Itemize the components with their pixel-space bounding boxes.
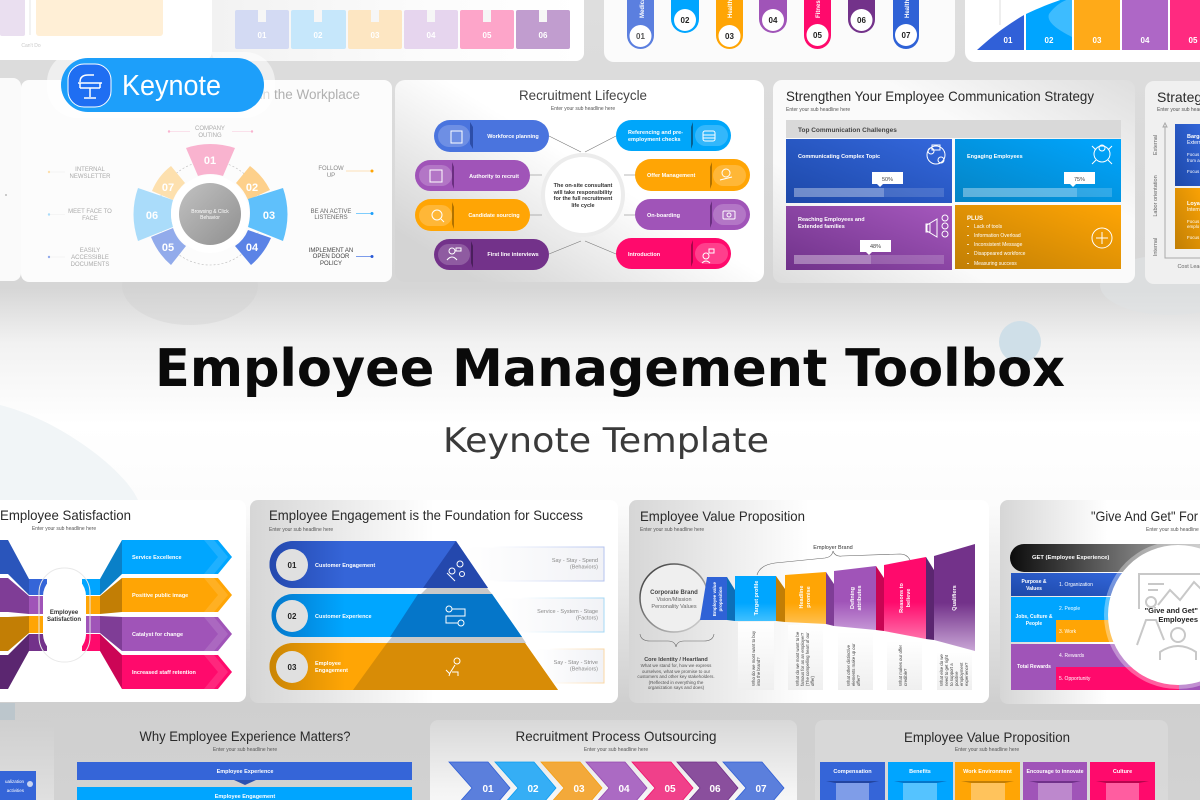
panel: top numbered cards xyxy=(212,0,584,61)
funnel sections: Headline xyxy=(799,586,805,608)
columns of questions: credible? xyxy=(903,668,908,686)
corporate brand circle: Personality Values xyxy=(651,604,697,610)
row 03 employee engagement: Employee xyxy=(315,661,341,667)
panel: top area chart: 02 xyxy=(1045,36,1054,45)
wheel diagram: 04 xyxy=(246,242,259,254)
tile: loyalty: Focus xyxy=(1187,235,1200,240)
capsule 02: 02 xyxy=(681,16,690,25)
tile: bargain: Focus xyxy=(1187,152,1200,157)
tile: bargain: Focus xyxy=(1187,169,1200,174)
pill: first line interviews: First line interviews xyxy=(487,252,539,258)
arrow: service excellence xyxy=(122,540,232,574)
tile: engaging employees: 75% xyxy=(1074,177,1085,183)
tile: loyalty: emplo xyxy=(1187,224,1200,229)
pill: authority to recruit xyxy=(415,160,530,191)
labels left and top: MEET FACE TO xyxy=(68,209,112,215)
tile: reaching employees: Extended families xyxy=(798,224,845,230)
GET pill xyxy=(1010,544,1200,572)
capsule 06 xyxy=(848,0,875,33)
funnel sections: believe xyxy=(906,589,912,607)
pill: referencing xyxy=(616,120,731,151)
column: compensation xyxy=(820,762,885,800)
subtitle: Enter your sub headline here xyxy=(640,527,704,533)
row 03 employee engagement xyxy=(269,643,558,690)
row 03 employee engagement: Engagement xyxy=(315,668,348,674)
tile: communicating complex topic: 50% xyxy=(882,177,893,183)
center circle xyxy=(543,155,623,235)
center circle: The on-site consultant xyxy=(554,183,613,189)
columns of questions: (The compelling heart of our xyxy=(805,632,810,686)
panel: top area chart: 03 xyxy=(1093,36,1102,45)
row: total rewards xyxy=(1011,644,1200,690)
labels right: UP xyxy=(327,173,335,179)
panel: employee value proposition funnel xyxy=(629,500,989,703)
title: Employee Value Proposition xyxy=(904,729,1070,745)
row 03 employee engagement: 03 xyxy=(288,663,297,672)
tile: loyalty: Intern xyxy=(1187,207,1200,213)
tile: engaging employees: Engaging Employees xyxy=(967,154,1023,160)
core identity note xyxy=(637,634,715,690)
side note boxes: Say - Stay - Spend xyxy=(552,558,598,564)
columns of questions: offer? xyxy=(856,674,861,686)
pill: offer management: Offer Management xyxy=(647,173,695,179)
column: compensation: Compensation xyxy=(833,769,872,775)
wheel diagram: 05 xyxy=(162,242,174,254)
labels left and top: OUTING xyxy=(198,133,222,139)
center oval: Satisfaction xyxy=(47,617,81,623)
labels left and top: INTERNAL xyxy=(75,167,105,173)
funnel sections: attributes xyxy=(857,585,863,611)
subtitle: Enter your sub headline here xyxy=(32,526,96,532)
panel: top left faded slide xyxy=(0,0,212,60)
row: purpose and values: Values xyxy=(1026,586,1042,592)
labels right: BE AN ACTIVE xyxy=(311,209,351,215)
panel: lower left slide: activities xyxy=(7,788,25,793)
columns of questions: What other distinctive xyxy=(846,644,851,686)
columns of questions: Who do we most want to buy xyxy=(751,630,756,686)
column: culture xyxy=(1090,762,1155,800)
center circle: Employees xyxy=(1158,615,1198,624)
column: work environment: Work Environment xyxy=(963,769,1012,775)
wheel diagram: 06 xyxy=(146,210,158,222)
row: total rewards: 5. Opportunity xyxy=(1059,676,1091,682)
row: jobs culture people: 2. People xyxy=(1059,606,1080,612)
corporate brand circle: Corporate Brand xyxy=(650,590,698,596)
columns of questions: What makes our offer xyxy=(898,644,903,686)
side note boxes: Service - System - Stage xyxy=(537,609,598,615)
column: work environment xyxy=(955,762,1020,800)
labels right xyxy=(309,166,374,267)
wheel diagram: 02 xyxy=(246,182,258,194)
axis labels: Labor orientation xyxy=(1153,175,1159,217)
labels left and top: ACCESSIBLE xyxy=(71,255,109,261)
row: jobs culture people xyxy=(1011,597,1136,642)
panel: top area chart: 05 xyxy=(1189,36,1198,45)
tile: plus list: Inconsistent Message xyxy=(974,242,1023,248)
center circle: for the full recruitment xyxy=(554,196,613,202)
arrow: positive public image: Positive public image xyxy=(132,593,188,599)
capsule 01: 01 xyxy=(636,32,645,41)
panel: top numbered cards: 01 xyxy=(258,31,267,40)
row 01 customer engagement: Customer Engagement xyxy=(315,563,375,569)
tile: bargain xyxy=(1175,124,1200,186)
pill: on-boarding: On-boarding xyxy=(647,213,680,219)
header band: Top Communication Challenges xyxy=(798,127,897,134)
axis labels: Internal xyxy=(1153,238,1159,256)
axes xyxy=(1163,123,1200,258)
funnel sections: Employee value xyxy=(712,582,717,616)
core identity note: customers and other key stakeholders. xyxy=(637,674,715,679)
columns of questions xyxy=(738,622,972,690)
title: Why Employee Experience Matters? xyxy=(140,728,351,744)
subtitle: Enter your sub headline here xyxy=(584,747,648,753)
pill: first line interviews xyxy=(434,239,549,270)
wheel diagram: 07 xyxy=(162,182,174,194)
arrow: positive public image xyxy=(122,578,232,612)
labels left and top: COMPANY xyxy=(195,126,225,132)
employer brand brace xyxy=(757,545,910,575)
axis labels: External xyxy=(1153,135,1159,155)
header band xyxy=(786,120,1121,138)
core identity note: What we stand for, how we express xyxy=(641,663,712,668)
funnel sections: Target profile xyxy=(754,581,760,615)
tile: loyalty xyxy=(1175,188,1200,249)
pill: referencing: employment checks xyxy=(628,137,681,143)
column: culture: Culture xyxy=(1113,769,1132,775)
arrow: catalyst for change: Catalyst for change xyxy=(132,632,183,638)
chevron steps xyxy=(449,762,784,800)
funnel sections xyxy=(700,544,975,651)
background block: lower left xyxy=(0,703,15,720)
capsule 07: 07 xyxy=(902,31,911,40)
side note boxes xyxy=(387,547,604,683)
panel: top area chart xyxy=(965,0,1200,62)
columns of questions: offer) xyxy=(810,675,815,686)
pill: workforce planning xyxy=(434,120,549,152)
panel title: in the Workplace xyxy=(260,87,360,102)
panel: give and get xyxy=(1000,500,1200,704)
core identity note: ourselves, what we promise to our xyxy=(642,669,711,674)
panel: top numbered cards: 06 xyxy=(539,31,548,40)
bar: employee experience: Employee Experience xyxy=(217,769,273,775)
tile: communicating complex topic: Communicating Complex Topic xyxy=(798,154,880,160)
tile: communicating complex topic xyxy=(786,139,952,203)
center circle xyxy=(1104,541,1200,689)
panel: top numbered cards: 04 xyxy=(427,31,436,40)
subtitle: Enter your sub headline here xyxy=(786,107,850,113)
column: encourage to innovate xyxy=(1023,762,1087,800)
panel: lower left slide xyxy=(0,720,54,800)
panel: communication in the workplace wheel xyxy=(21,80,392,282)
chevron steps: 05 xyxy=(664,784,676,795)
subtitle: Enter your sub headline here xyxy=(213,747,277,753)
wheel diagram: 03 xyxy=(263,210,275,222)
pill: on-boarding xyxy=(635,199,750,230)
wheel diagram: Behavior xyxy=(200,215,220,221)
left folded ribbons xyxy=(0,540,47,689)
panel: top numbered cards: 02 xyxy=(314,31,323,40)
title: Employee Satisfaction xyxy=(0,507,131,523)
capsule 05: 05 xyxy=(813,31,822,40)
wheel diagram xyxy=(134,144,288,265)
columns of questions: famous for as an employer? xyxy=(800,632,805,686)
tile: reaching employees: 48% xyxy=(870,244,881,250)
capsule 07 xyxy=(893,0,919,49)
panel: top numbered cards: 05 xyxy=(483,31,492,40)
columns of questions: to support a xyxy=(949,663,954,686)
pill: authority to recruit: Authority to recruit xyxy=(469,174,519,180)
panel: top area chart: 01 xyxy=(1004,36,1013,45)
capsule 03 xyxy=(716,0,743,49)
row 02 customer experience: Customer Experience xyxy=(315,614,372,620)
panel: top area chart: 04 xyxy=(1141,36,1150,45)
tile: engaging employees xyxy=(955,139,1121,202)
row 01 customer engagement: 01 xyxy=(288,561,297,570)
badge: Keynote xyxy=(47,52,275,118)
connector lines xyxy=(530,136,635,254)
center oval xyxy=(39,568,90,662)
row 01 customer engagement xyxy=(269,541,488,588)
corporate brand circle xyxy=(640,564,708,632)
labels right: OPEN DOOR xyxy=(313,254,350,260)
arrow: service excellence: Service Excellence xyxy=(132,555,182,561)
caption: cannot do: Can't Do xyxy=(21,43,41,49)
pill: offer management xyxy=(635,159,750,191)
tile: reaching employees xyxy=(786,206,952,270)
chevron steps: 07 xyxy=(755,784,767,795)
center circle: life cycle xyxy=(571,203,595,209)
panel: left edge slide xyxy=(0,78,21,281)
subtitle: Enter your sub headline here xyxy=(551,106,615,112)
employer brand brace: Employer Brand xyxy=(813,545,853,551)
columns of questions: experience? xyxy=(964,662,969,686)
row: purpose and values: Purpose & xyxy=(1021,579,1047,585)
pill: introduction: Introduction xyxy=(628,252,661,258)
funnel sections: promise xyxy=(806,586,812,608)
arrow: catalyst for change xyxy=(122,617,232,651)
panel: top numbered cards: 03 xyxy=(371,31,380,40)
columns of questions: positive xyxy=(954,671,959,686)
labels left and top: DOCUMENTS xyxy=(71,262,109,268)
tile: plus list: Information Overload xyxy=(974,233,1021,239)
main title: Employee Management Toolbox xyxy=(155,339,1065,399)
pill: workforce planning: Workforce planning xyxy=(487,134,539,140)
panel: employee communication strategy xyxy=(773,80,1135,283)
capsule 01 xyxy=(627,0,654,49)
columns of questions: employment xyxy=(959,662,964,686)
funnel sections: Reasons to xyxy=(899,583,905,613)
core identity note: organization says and does) xyxy=(648,685,705,690)
side note boxes: (Behaviors) xyxy=(570,564,598,570)
row: total rewards: 4. Rewards xyxy=(1059,653,1085,659)
core identity note: Core Identity / Heartland xyxy=(644,657,708,663)
panel: strategy matrix xyxy=(1145,81,1200,284)
badge label: Keynote xyxy=(122,70,221,102)
capsule 03: Health xyxy=(728,0,734,18)
tile: plus list: Measuring success xyxy=(974,261,1017,267)
funnel sections: Qualifiers xyxy=(952,585,958,611)
capsule 07: Health xyxy=(905,0,911,18)
chevron steps: 03 xyxy=(573,784,585,795)
pill: candidate sourcing xyxy=(415,199,530,231)
icon: keynote podium xyxy=(78,75,102,98)
right band connectors xyxy=(82,540,122,689)
bar: employee engagement: Employee Engagement xyxy=(215,794,275,800)
capsule 06: 06 xyxy=(857,16,866,25)
panel: top numbered capsules xyxy=(604,0,955,62)
GET pill: GET (Employee Experience) xyxy=(1032,555,1109,561)
columns of questions: need to get right xyxy=(944,654,949,686)
pill: introduction xyxy=(616,238,731,269)
labels left and top xyxy=(48,126,253,268)
columns of questions: into the brand? xyxy=(756,657,761,686)
panel: recruitment lifecycle xyxy=(395,80,764,282)
center oval: Employee xyxy=(50,610,79,616)
background arc: left xyxy=(0,405,138,500)
panel: lower left slide: ualization xyxy=(5,779,24,784)
title: Employee Engagement is the Foundation for Success xyxy=(269,507,583,523)
labels left and top: NEWSLETTER xyxy=(69,174,111,180)
labels right: POLICY xyxy=(320,261,342,267)
columns of questions: elements make up our xyxy=(851,643,856,686)
column: benefits xyxy=(888,762,953,800)
tile: reaching employees: Reaching Employees and xyxy=(798,217,865,223)
side note boxes: (Behaviors) xyxy=(570,666,598,672)
row 02 customer experience xyxy=(272,594,522,637)
row 02 customer experience: 02 xyxy=(288,612,297,621)
row: total rewards: Total Rewards xyxy=(1017,664,1051,670)
capsule 02 xyxy=(671,0,699,33)
tile: plus list: Lack of tools xyxy=(974,224,1003,230)
pill: candidate sourcing: Candidate sourcing xyxy=(468,213,520,219)
row: purpose and values: 1. Organization xyxy=(1059,582,1093,588)
labels left and top: FACE xyxy=(82,216,98,222)
labels right: LISTENERS xyxy=(314,215,348,221)
row: jobs culture people: Jobs, Culture & xyxy=(1016,614,1053,620)
background circle: blue accent xyxy=(999,321,1041,363)
background circle: top right xyxy=(1100,255,1200,315)
title: Recruitment Lifecycle xyxy=(519,87,647,103)
tile: plus list: PLUS xyxy=(967,216,983,222)
icon: presentation xyxy=(1137,574,1200,660)
labels right: IMPLEMENT AN xyxy=(309,248,353,254)
capsule 05 xyxy=(804,0,831,49)
panel: employee satisfaction xyxy=(0,500,246,702)
main subtitle: Keynote Template xyxy=(443,421,769,461)
column: encourage to innovate: Encourage to innovate xyxy=(1026,769,1084,775)
axis labels xyxy=(1153,135,1200,270)
capsule 04 xyxy=(759,0,787,33)
title: Strengthen Your Employee Communication Strategy xyxy=(786,88,1094,104)
funnel sections: proposition xyxy=(718,586,723,611)
pill: referencing: Referencing and pre- xyxy=(628,130,683,136)
corporate brand circle: Vision/Mission xyxy=(656,597,692,603)
panel: recruitment process outsourcing xyxy=(430,720,797,800)
arrow: increased staff retention: Increased staff retention xyxy=(132,670,197,676)
chevron steps: 01 xyxy=(482,784,494,795)
panel: why employee experience matters xyxy=(77,728,412,800)
capsule 03: 03 xyxy=(725,32,734,41)
subtitle: Enter your sub headline here xyxy=(955,747,1019,753)
tile: bargain: from a xyxy=(1187,158,1200,163)
subtitle: Enter your sub headline xyxy=(1146,527,1199,533)
labels left and top: EASILY xyxy=(80,248,100,254)
row: jobs culture people: People xyxy=(1026,621,1042,627)
background circle: top left xyxy=(122,245,258,325)
bar: employee engagement xyxy=(77,787,412,800)
subtitle: Enter your sub headline here xyxy=(269,527,333,533)
title: Recruitment Process Outsourcing xyxy=(516,728,716,744)
funnel sections: Defining xyxy=(850,587,856,609)
wheel diagram: 01 xyxy=(204,155,216,167)
row: jobs culture people: 3. Work xyxy=(1059,629,1077,635)
chevron steps: 02 xyxy=(527,784,539,795)
wheel diagram: Browsing & Click xyxy=(191,209,229,215)
tile: plus list: Disappeared workforce xyxy=(974,251,1026,257)
labels right: FOLLOW xyxy=(318,166,344,172)
center circle: will take responsibility xyxy=(553,190,613,196)
side note boxes: (Factors) xyxy=(576,616,598,622)
bar: employee experience xyxy=(77,762,412,785)
capsule 04: 04 xyxy=(769,16,778,25)
chevron steps: 06 xyxy=(709,784,721,795)
column: benefits: Benefits xyxy=(909,769,931,775)
tile: plus list xyxy=(955,205,1121,269)
columns of questions: What do we most want to be xyxy=(795,631,800,686)
side note boxes: Say - Stay - Strive xyxy=(554,660,598,666)
chevron steps: 04 xyxy=(618,784,630,795)
panel: employee engagement pyramid xyxy=(250,500,618,703)
tile: loyalty: Focus xyxy=(1187,219,1200,224)
title: Employee Value Proposition xyxy=(640,508,805,524)
arrow: increased staff retention xyxy=(122,655,232,689)
columns of questions: What else do we xyxy=(939,654,944,686)
center circle: "Give and Get" xyxy=(1145,606,1198,615)
core identity note: (Reflected in everything the xyxy=(649,680,704,685)
panel: employee value proposition columns xyxy=(815,720,1168,800)
row: purpose and values xyxy=(1011,573,1136,596)
